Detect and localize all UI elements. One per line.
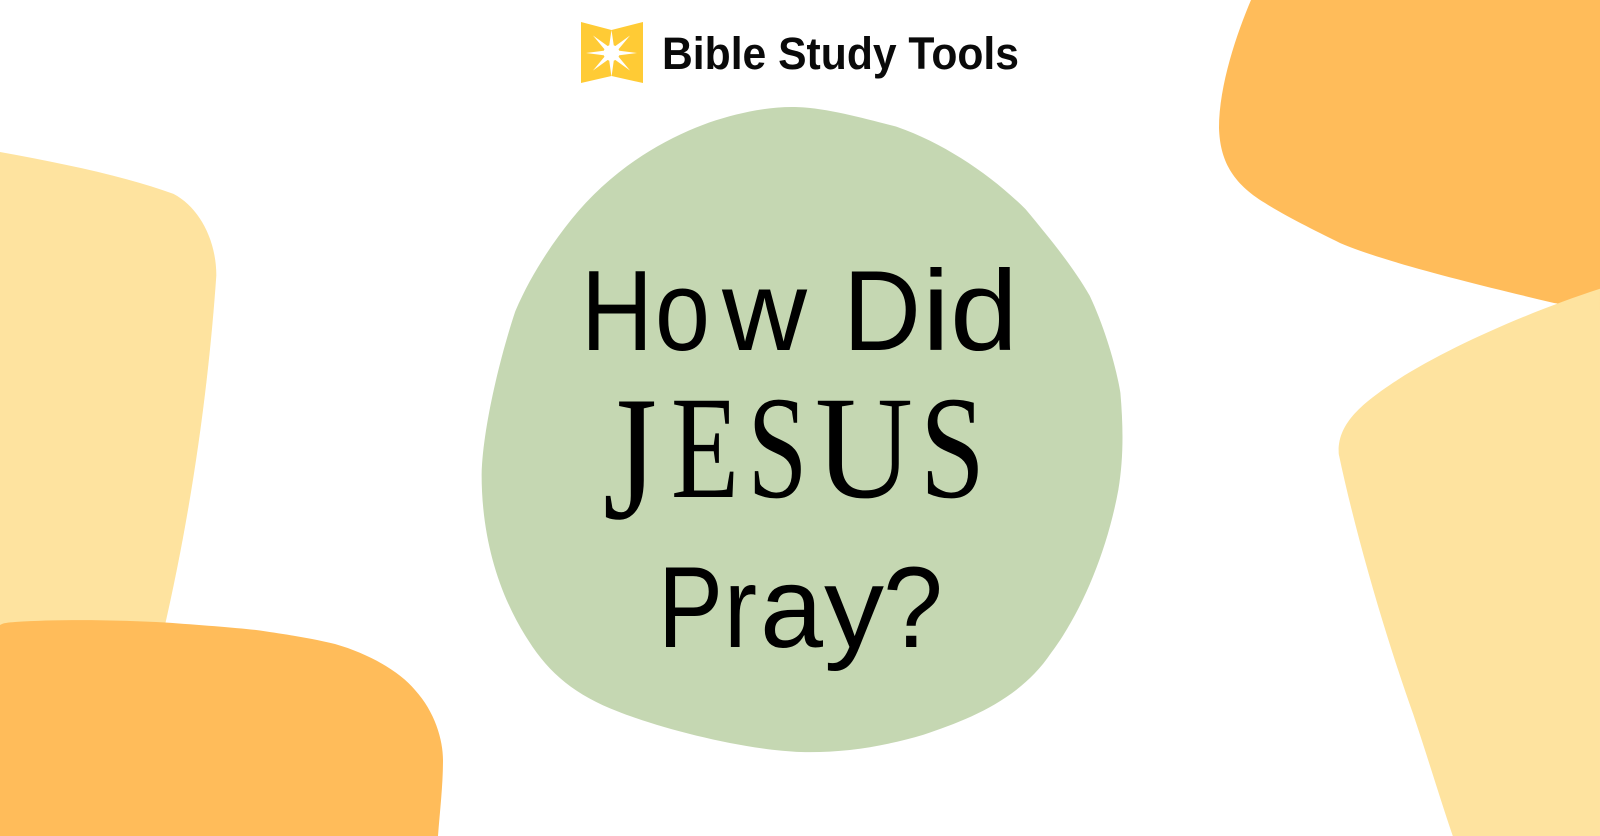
blob: left orange xyxy=(0,620,443,836)
title line: JESUS: J xyxy=(603,359,657,557)
title xyxy=(581,248,1018,672)
title line: How Did: d xyxy=(950,248,1018,375)
logo wordmark: Bible Study Tools xyxy=(662,28,1019,79)
logo: Bible Study Tools xyxy=(581,22,1019,83)
icon: star xyxy=(586,30,637,77)
blob: right orange xyxy=(1219,0,1600,310)
title line: JESUS: S xyxy=(920,366,985,529)
title line: JESUS: S xyxy=(748,366,808,529)
blob: left pale yellow xyxy=(0,152,216,633)
title line: How Did: H xyxy=(581,248,653,375)
icon: open book with star xyxy=(581,22,643,83)
icon: book xyxy=(581,22,643,83)
title line: Pray?: r xyxy=(724,544,757,672)
title line: JESUS: U xyxy=(815,366,913,529)
title line: JESUS: E xyxy=(671,366,739,529)
title line: How Did: i xyxy=(922,248,950,375)
blob: central green circle xyxy=(482,107,1122,752)
title line: Pray?: ? xyxy=(883,544,943,672)
blob: right pale yellow xyxy=(1339,289,1600,836)
title line: How Did: w xyxy=(721,248,808,375)
title line: How Did: D xyxy=(843,248,921,375)
title line: Pray?: P xyxy=(658,544,723,672)
title line: Pray?: y xyxy=(824,544,885,672)
title line: How Did: o xyxy=(655,248,710,375)
title line: Pray?: a xyxy=(760,544,823,672)
